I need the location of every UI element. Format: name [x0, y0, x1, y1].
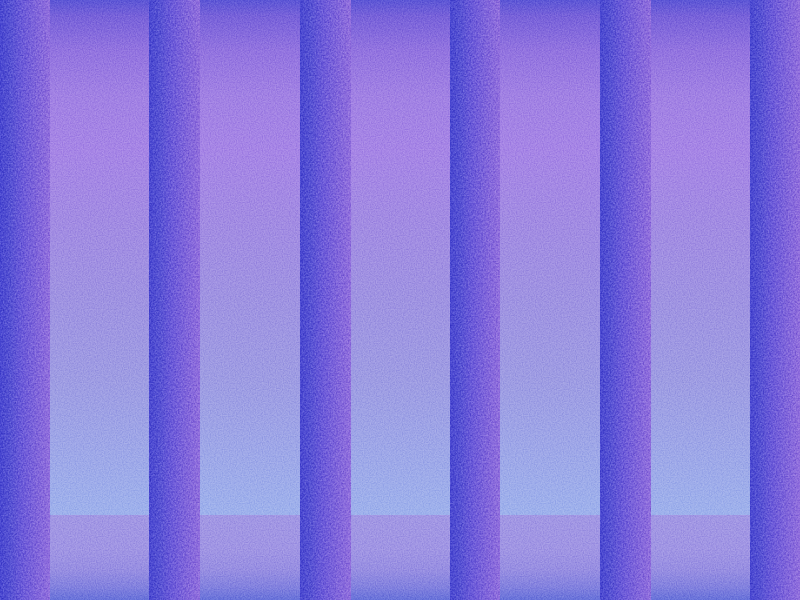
- column 5: [600, 0, 651, 600]
- column 4: [450, 0, 500, 600]
- column 3: [300, 0, 351, 600]
- column 1: [0, 0, 50, 600]
- panel: floor band: [0, 515, 800, 600]
- column 2: [149, 0, 200, 600]
- column 6: [750, 0, 800, 600]
